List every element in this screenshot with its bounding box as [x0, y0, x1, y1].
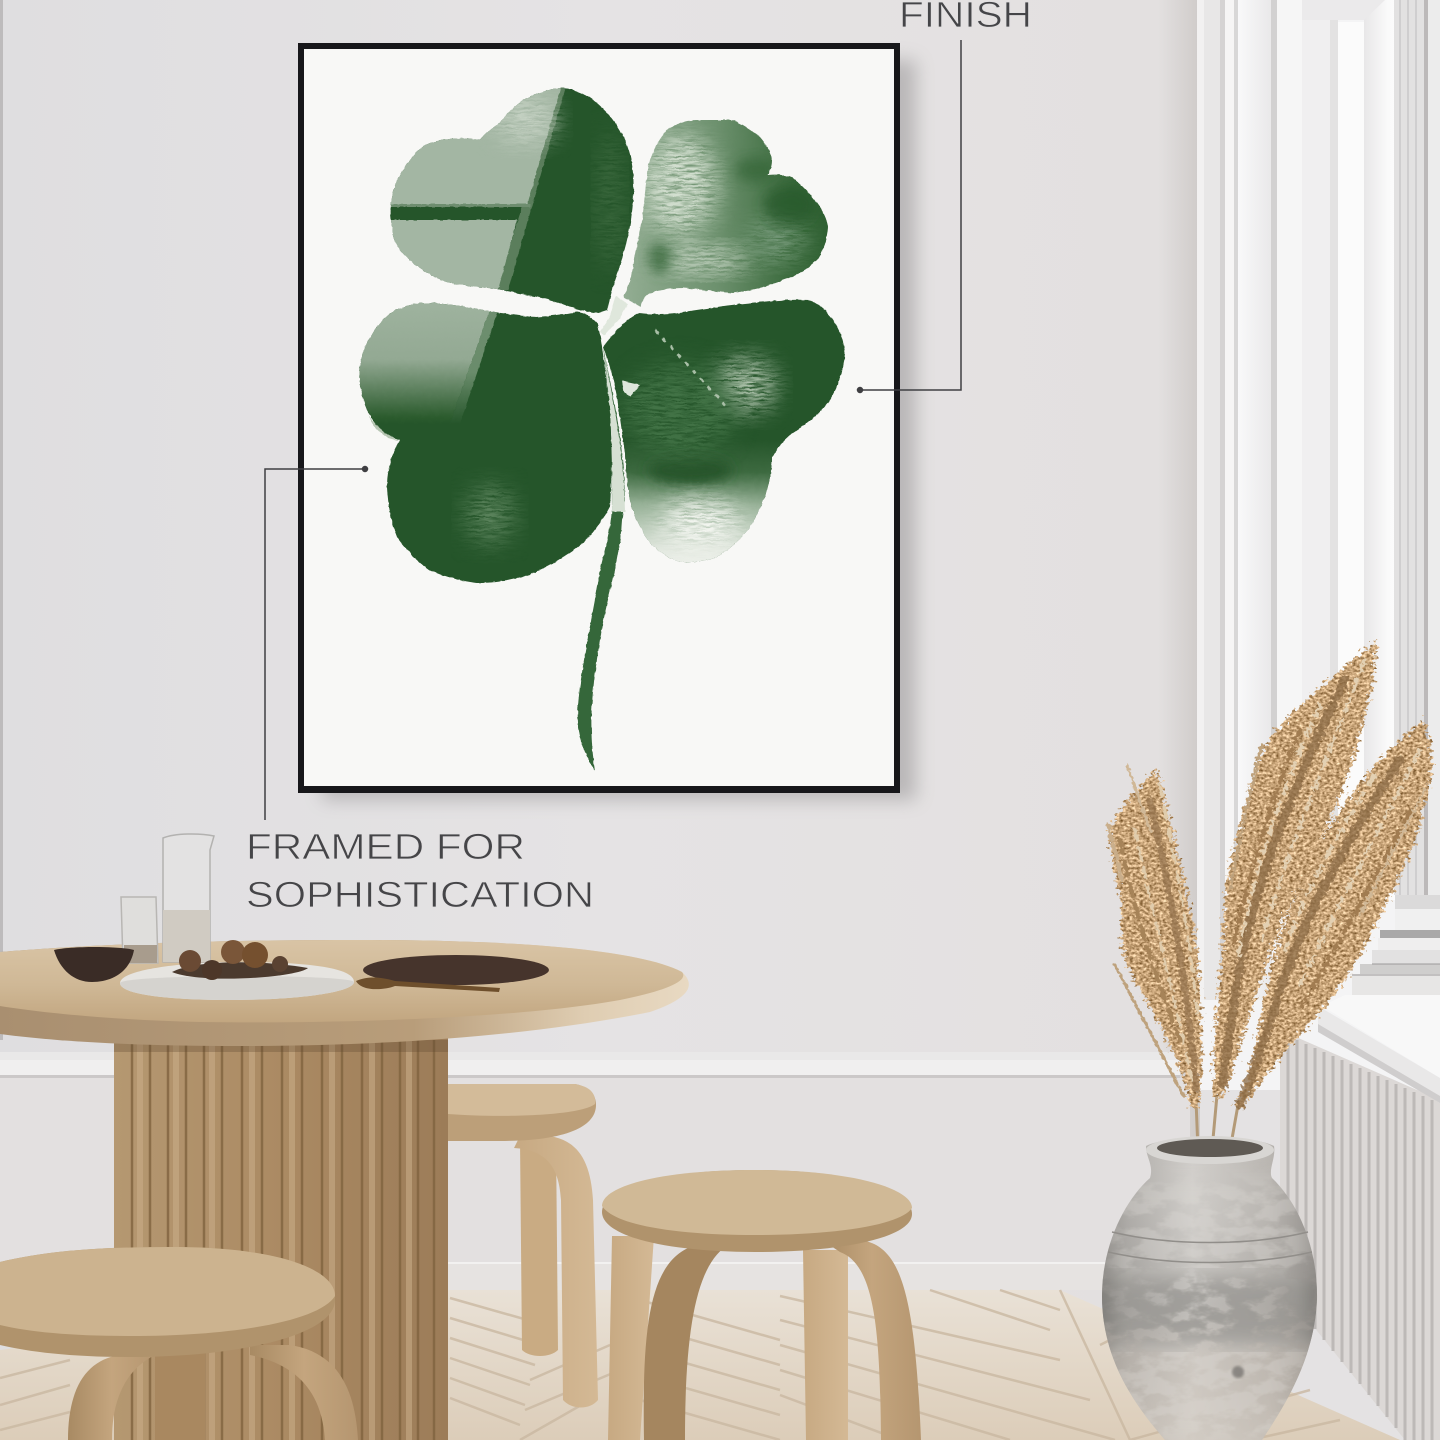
wooden spoon — [356, 978, 500, 992]
pampas grass — [1108, 640, 1431, 1150]
leaf lower left — [358, 302, 612, 584]
middle plume — [1213, 640, 1377, 1100]
callout: framed for sophistication: FRAMED FOR — [246, 826, 525, 867]
left plume — [1108, 765, 1202, 1108]
stacked books on window sill — [1352, 930, 1440, 995]
front right stool — [602, 1170, 921, 1440]
four-leaf clover — [350, 80, 850, 771]
dark wooden plate — [363, 955, 549, 985]
window frame and mouldings — [1197, 0, 1440, 1090]
black frame — [298, 43, 900, 793]
marble plate with nuts — [120, 940, 354, 1000]
table top — [0, 940, 689, 1046]
window sill — [1318, 995, 1440, 1103]
frame shadow — [322, 60, 916, 800]
fluted pedestal — [114, 1030, 448, 1440]
herringbone floor — [0, 1290, 1400, 1440]
white paper — [304, 49, 894, 786]
radiator — [1280, 1030, 1440, 1440]
framed print — [265, 40, 961, 820]
clover centre highlight — [600, 296, 628, 336]
callout leader lines and dots — [265, 40, 961, 820]
ceramic vase — [1095, 1136, 1325, 1440]
front left stool — [0, 1247, 358, 1440]
wooden bowl — [54, 947, 134, 982]
chair rail and skirting — [0, 1052, 1190, 1290]
table — [0, 940, 689, 1440]
callout: framed for sophistication: SOPHISTICATION — [246, 874, 594, 915]
glass carafe and cup — [121, 834, 214, 963]
back stool — [448, 1084, 598, 1408]
leaf top left — [390, 88, 634, 313]
pampas stems — [1196, 1095, 1238, 1150]
stem — [578, 347, 625, 771]
leaf top right — [624, 120, 828, 307]
callout: framed for sophistication — [246, 826, 594, 915]
leaf right — [600, 295, 850, 570]
right plume — [1235, 720, 1431, 1110]
